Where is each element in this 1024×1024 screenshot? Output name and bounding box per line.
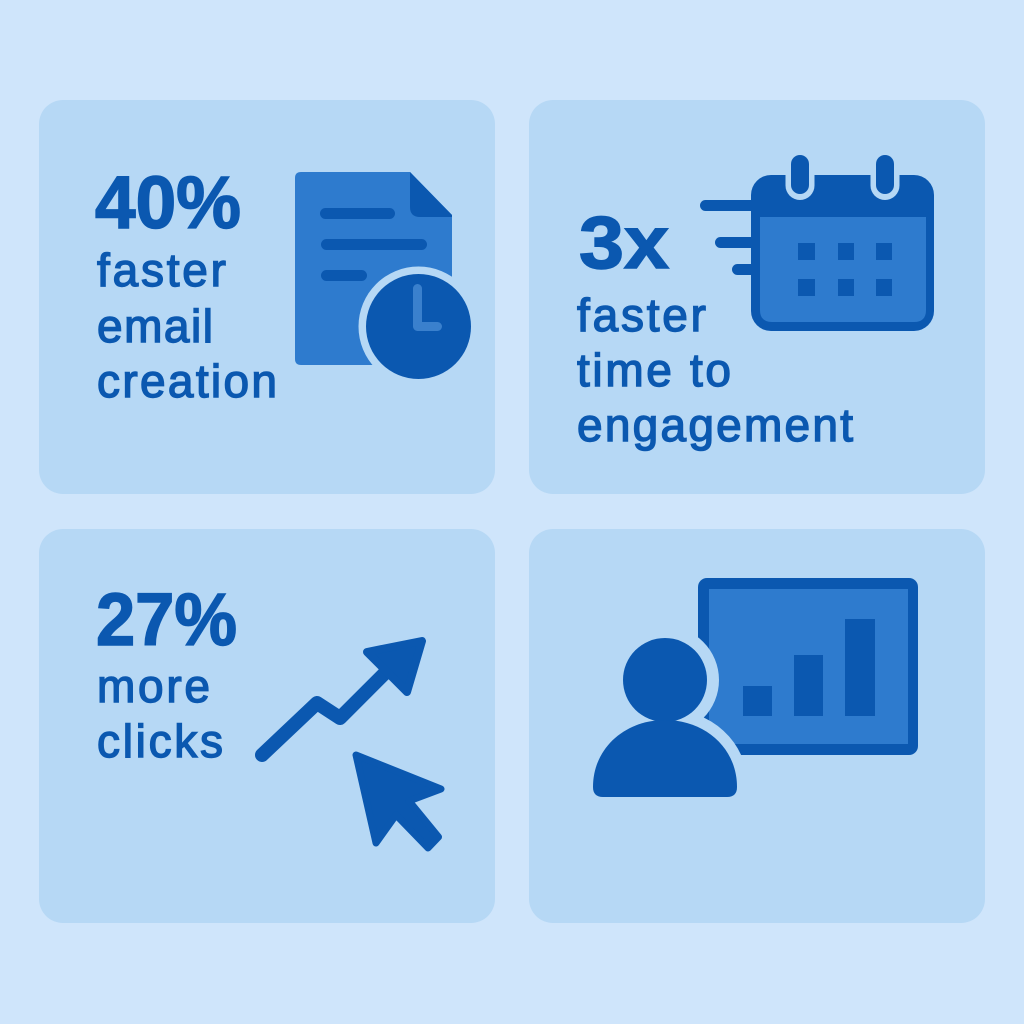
label: more clicks — [97, 660, 223, 767]
stat: 40%: 40% — [95, 161, 241, 244]
label: more clicks: clicks — [97, 715, 223, 767]
label: faster email creation — [97, 244, 277, 407]
label: faster time to engagement: engagement — [577, 399, 853, 451]
icon: person — [593, 626, 737, 797]
panel: person with chart — [529, 529, 985, 923]
icon: rising arrow — [262, 641, 422, 755]
label: faster email creation: creation — [97, 355, 277, 407]
label: faster time to engagement — [577, 289, 853, 451]
panel: faster time to engagement — [529, 100, 985, 494]
stat: 27%: 27% — [96, 578, 237, 661]
label: more clicks: more — [97, 660, 210, 712]
icon: calendar with speed lines — [700, 149, 934, 331]
label: faster time to engagement: faster — [577, 289, 706, 341]
label: faster time to engagement: time to — [577, 344, 731, 396]
icon: document with clock — [295, 172, 478, 386]
label: faster email creation: email — [97, 300, 213, 352]
panel: more clicks — [39, 529, 495, 923]
panel: faster email creation — [39, 100, 495, 494]
icon: mouse cursor — [356, 755, 441, 848]
icon: presentation screen with bars — [698, 578, 918, 755]
label: faster email creation: faster — [97, 244, 226, 296]
stat: 3x: 3x — [579, 201, 669, 284]
